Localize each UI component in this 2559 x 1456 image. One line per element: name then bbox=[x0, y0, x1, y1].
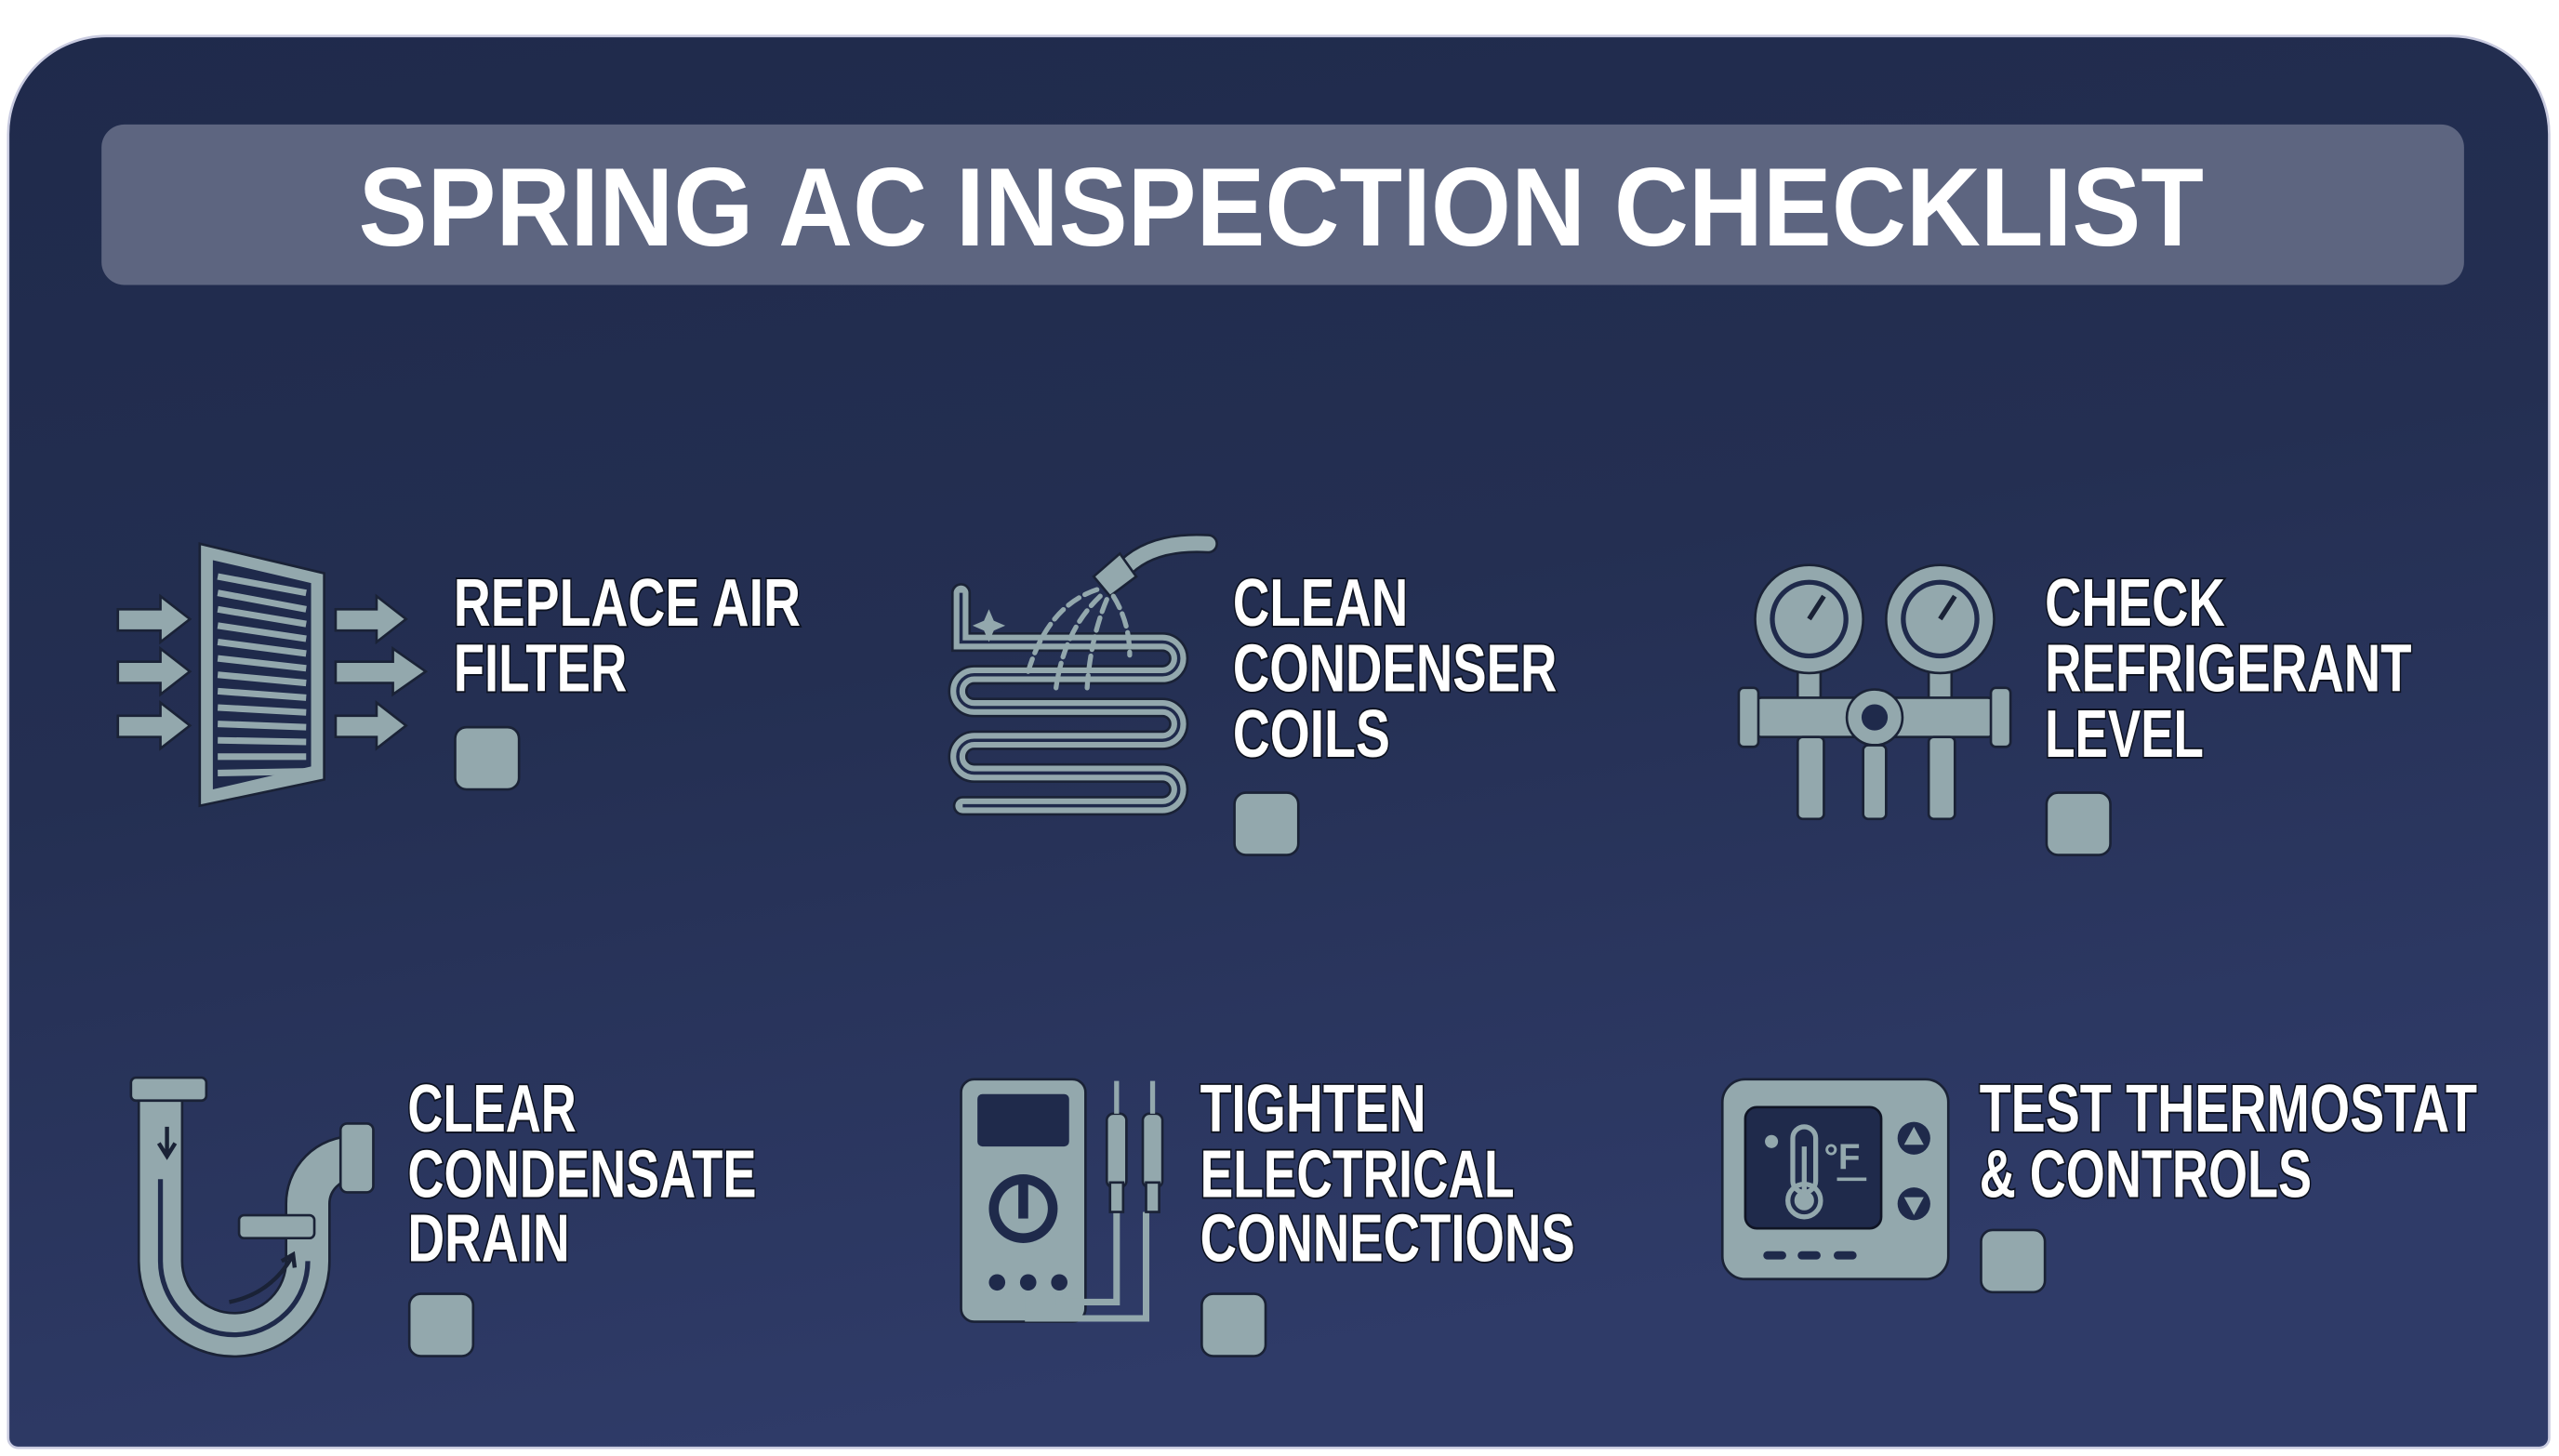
checkbox bbox=[1981, 1230, 2045, 1292]
label bbox=[1980, 1072, 2477, 1212]
icon: manifold gauges bbox=[1739, 565, 2010, 819]
icon: thermostat bbox=[1722, 1079, 1948, 1279]
icon: thermostat: °F bbox=[1823, 1138, 1861, 1178]
label: TIGHTEN bbox=[1200, 1072, 1426, 1146]
label: CHECK bbox=[2045, 566, 2225, 641]
label bbox=[454, 566, 801, 706]
label: FILTER bbox=[454, 631, 627, 706]
title bar bbox=[101, 125, 2464, 285]
label: CONDENSER bbox=[1233, 631, 1557, 706]
item: clean condenser coils bbox=[958, 543, 1557, 855]
checkbox bbox=[455, 727, 519, 789]
checkbox bbox=[1235, 793, 1298, 855]
label bbox=[1233, 566, 1557, 772]
label: CONDENSATE bbox=[407, 1138, 756, 1212]
item: test thermostat & controls bbox=[1722, 1072, 2477, 1292]
label: REFRIGERANT bbox=[2045, 631, 2412, 706]
item: replace air filter bbox=[118, 544, 801, 806]
label bbox=[2045, 566, 2412, 772]
label bbox=[1200, 1072, 1575, 1276]
icon: drain trap bbox=[131, 1078, 373, 1335]
label: CONNECTIONS bbox=[1200, 1201, 1575, 1276]
checkbox bbox=[1201, 1294, 1266, 1357]
label: CLEAN bbox=[1233, 566, 1408, 641]
label: & CONTROLS bbox=[1980, 1138, 2312, 1212]
label: ELECTRICAL bbox=[1200, 1138, 1515, 1212]
item: tighten electrical connections bbox=[961, 1072, 1575, 1357]
item: clear condensate drain bbox=[131, 1072, 756, 1357]
checkbox bbox=[409, 1294, 473, 1357]
checkbox bbox=[2047, 793, 2111, 855]
item: check refrigerant level bbox=[1739, 565, 2412, 855]
label: REPLACE AIR bbox=[454, 566, 801, 641]
label: COILS bbox=[1233, 697, 1390, 772]
icon: air filter bbox=[118, 544, 426, 806]
label: CLEAR bbox=[407, 1072, 577, 1146]
label: LEVEL bbox=[2045, 697, 2204, 772]
label: DRAIN bbox=[407, 1201, 570, 1276]
title: SPRING AC INSPECTION CHECKLIST bbox=[359, 146, 2204, 270]
icon: coils and hose bbox=[958, 543, 1208, 806]
icon: multimeter bbox=[961, 1079, 1162, 1322]
label bbox=[407, 1072, 756, 1276]
